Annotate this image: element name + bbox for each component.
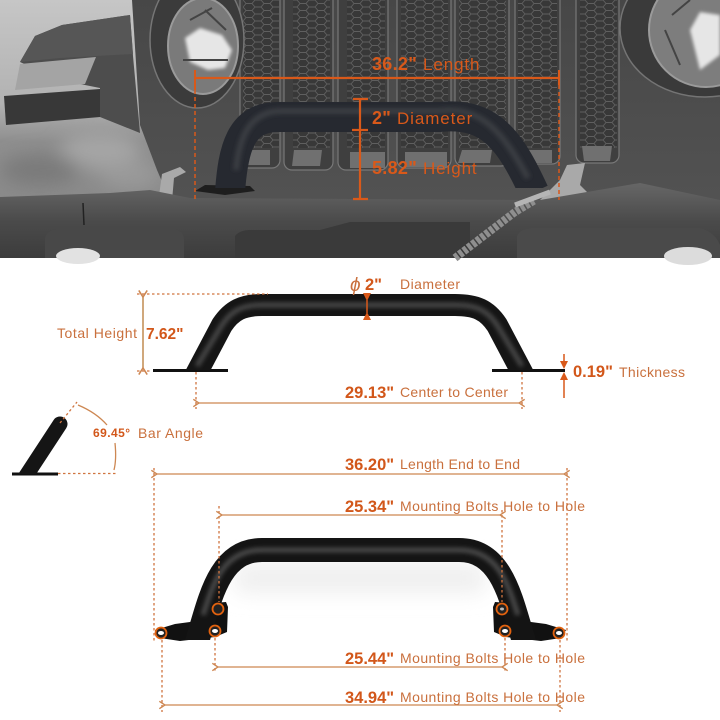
center to center dimension: Center to Center — [400, 384, 508, 400]
thickness dimension — [560, 354, 685, 398]
center to center dimension — [196, 372, 522, 409]
front view bar with mounting plates — [155, 550, 566, 645]
diameter dimension: ϕ — [350, 275, 361, 296]
middle mounting bolts dimension: 25.44" — [345, 650, 394, 668]
bumper — [0, 183, 720, 258]
bar angle detail — [12, 402, 203, 482]
left headlight — [150, 0, 244, 108]
total height dimension: 7.62" — [146, 326, 184, 343]
bar in photo — [195, 110, 534, 195]
middle mounting bolts dimension — [215, 638, 585, 673]
length end to end dimension — [154, 456, 567, 643]
height label — [372, 158, 478, 178]
diagram: side-on bar — [153, 305, 565, 378]
length dimension: 36.2" — [372, 54, 417, 74]
grille frames and pillars — [240, 0, 619, 170]
lower mounting bolts dimension — [162, 640, 585, 712]
mounting bolt holes — [156, 604, 564, 638]
bar angle detail: 69.45° — [93, 426, 130, 440]
grille slot lower chips — [248, 146, 612, 168]
photo: jeep front with bar — [0, 0, 720, 265]
grille body — [132, 0, 720, 200]
total height dimension — [57, 294, 268, 371]
diameter dimension: Diameter — [400, 276, 460, 292]
hood latches — [158, 163, 590, 205]
upper mounting bolts dimension: Mounting Bolts Hole to Hole — [400, 498, 585, 514]
middle mounting bolts dimension: Mounting Bolts Hole to Hole — [400, 650, 585, 666]
diameter dimension: 2" — [365, 276, 382, 294]
thickness dimension: Thickness — [619, 364, 685, 380]
center to center dimension: 29.13" — [345, 384, 394, 402]
thickness dimension: 0.19" — [573, 363, 613, 381]
length end to end dimension: 36.20" — [345, 456, 394, 474]
total height dimension: Total Height — [57, 325, 137, 341]
height bracket — [352, 99, 368, 199]
grille mesh — [243, 0, 617, 148]
left fender flare — [4, 15, 140, 133]
upper mounting bolts dimension: 25.34" — [345, 498, 394, 516]
length dimension — [195, 54, 559, 200]
diameter label: Diameter — [397, 109, 473, 128]
diameter dimension — [350, 275, 460, 313]
smoke clouds — [0, 132, 160, 189]
lower mounting bolts dimension: Mounting Bolts Hole to Hole — [400, 689, 585, 705]
height label: Height — [423, 159, 478, 178]
bumper lower panels — [45, 203, 720, 265]
lower mounting bolts dimension: 34.94" — [345, 689, 394, 707]
length end to end dimension: Length End to End — [400, 456, 520, 472]
upper mounting bolts dimension — [219, 498, 585, 602]
diameter label: 2" — [372, 108, 391, 128]
right headlight — [620, 0, 720, 97]
length dimension: Length — [423, 55, 480, 74]
bar angle detail: Bar Angle — [138, 425, 203, 441]
height label: 5.82" — [372, 158, 417, 178]
winch rope — [455, 192, 550, 258]
